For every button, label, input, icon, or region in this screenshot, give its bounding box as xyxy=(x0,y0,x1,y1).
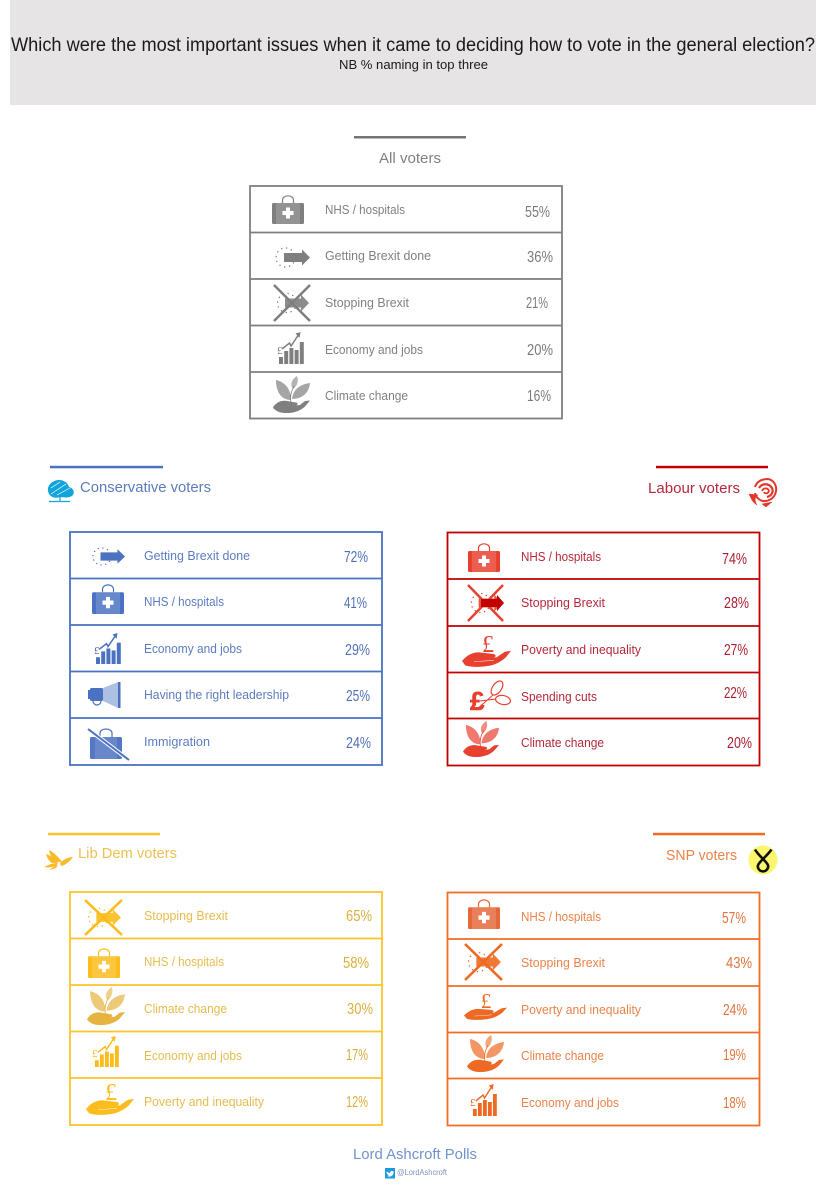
icon: pound in hand: £ xyxy=(105,1080,117,1106)
value: 30%: 30% xyxy=(347,1001,373,1018)
table frame xyxy=(250,186,562,418)
value: 22%: 22% xyxy=(724,685,747,702)
label: NHS / hospitals: NHS / hospitals xyxy=(521,909,601,924)
icon: pound in hand xyxy=(86,1080,134,1115)
panel: conservative voters xyxy=(48,466,382,765)
label: Climate change: Climate change xyxy=(144,1001,227,1016)
header band xyxy=(10,0,816,105)
table frame xyxy=(70,532,382,765)
label: NHS / hospitals: NHS / hospitals xyxy=(325,202,405,217)
label: Spending cuts: Spending cuts xyxy=(521,689,597,704)
icon: lib dem bird logo xyxy=(44,850,73,870)
panel: lib dem voters xyxy=(44,833,382,1125)
icon: economy chart xyxy=(92,1036,119,1067)
table frame xyxy=(448,532,760,766)
value: 25%: 25% xyxy=(346,688,370,705)
icon: medical case xyxy=(88,949,120,978)
heading: snp voters: SNP voters xyxy=(666,847,737,864)
label: Economy and jobs: Economy and jobs xyxy=(144,1048,242,1063)
icon: arrow leaving EU stars xyxy=(93,548,125,565)
icon: labour rose logo xyxy=(749,479,776,507)
value: 24%: 24% xyxy=(346,735,371,752)
icon: snp logo xyxy=(748,846,778,874)
label: Getting Brexit done: Getting Brexit done xyxy=(144,548,250,563)
label: Having the right leadership: Having the right leadership xyxy=(144,687,289,702)
heading: labour voters: Labour voters xyxy=(648,480,740,497)
label: Poverty and inequality: Poverty and inequality xyxy=(144,1094,264,1109)
heading: labour voters xyxy=(648,466,768,497)
value: 55%: 55% xyxy=(525,204,550,221)
icon: megaphone xyxy=(88,682,120,708)
heading: all voters: All voters xyxy=(379,150,441,167)
label: Poverty and inequality: Poverty and inequality xyxy=(521,1002,641,1017)
label: Poverty and inequality: Poverty and inequality xyxy=(521,642,641,657)
icon: pound in hand: £ xyxy=(481,989,491,1013)
brand name: Lord Ashcroft Polls xyxy=(353,1146,477,1163)
label: Economy and jobs: Economy and jobs xyxy=(325,342,423,357)
label: Climate change: Climate change xyxy=(521,1048,604,1063)
heading: conservative voters: Conservative voters xyxy=(80,479,211,496)
value: 24%: 24% xyxy=(723,1002,747,1019)
label: Climate change: Climate change xyxy=(325,388,408,403)
heading: lib dem voters xyxy=(48,833,177,862)
label: Immigration: Immigration xyxy=(144,734,210,749)
value: 21%: 21% xyxy=(526,295,548,312)
value: 74%: 74% xyxy=(722,551,747,568)
value: 36%: 36% xyxy=(527,249,553,266)
value: 16%: 16% xyxy=(527,388,551,405)
icon: crossed out arrow xyxy=(468,585,504,621)
title: Which were the most important issues when it came to deciding how to vote in the general election? xyxy=(11,35,815,56)
heading: lib dem voters: Lib Dem voters xyxy=(78,845,177,862)
icon: scissors cutting pound: £ xyxy=(470,686,485,716)
table frame xyxy=(70,892,382,1125)
value: 72%: 72% xyxy=(344,549,368,566)
icon: economy chart xyxy=(470,1084,497,1116)
icon: plant in hand xyxy=(463,721,499,757)
icon: pound in hand xyxy=(464,989,507,1020)
table frame xyxy=(448,892,760,1126)
value: 65%: 65% xyxy=(346,908,372,925)
value: 41%: 41% xyxy=(344,595,367,612)
icon: economy chart: £ xyxy=(470,1097,476,1109)
label: NHS / hospitals: NHS / hospitals xyxy=(521,549,601,564)
value: 17%: 17% xyxy=(346,1047,368,1064)
twitter handle: @LordAshcroft xyxy=(397,1168,448,1177)
value: 12%: 12% xyxy=(346,1094,368,1111)
label: Stopping Brexit: Stopping Brexit xyxy=(325,295,409,310)
icon: arrow leaving EU stars xyxy=(276,248,310,267)
panel: labour voters xyxy=(448,466,776,766)
label: NHS / hospitals: NHS / hospitals xyxy=(144,954,224,969)
icon: economy chart: £ xyxy=(94,645,100,657)
icon: medical case xyxy=(92,585,124,614)
panel: all voters xyxy=(250,136,562,418)
icon: crossed out arrow xyxy=(465,944,502,980)
icon: plant in hand xyxy=(87,987,125,1025)
value: 27%: 27% xyxy=(724,642,748,659)
subtitle: NB % naming in top three xyxy=(339,57,488,72)
label: Climate change: Climate change xyxy=(521,735,604,750)
value: 19%: 19% xyxy=(723,1047,746,1064)
icon: economy chart xyxy=(277,332,304,364)
value: 20%: 20% xyxy=(527,342,553,359)
label: Stopping Brexit: Stopping Brexit xyxy=(144,908,228,923)
icon: economy chart xyxy=(94,633,121,664)
icon: crossed out arrow xyxy=(85,900,122,935)
heading: snp voters xyxy=(653,833,765,864)
heading: all voters xyxy=(354,136,466,167)
icon: plant in hand xyxy=(467,1035,504,1072)
panel: snp voters xyxy=(448,833,778,1126)
value: 18%: 18% xyxy=(723,1095,746,1112)
value: 20%: 20% xyxy=(727,735,752,752)
icon: crossed out suitcase xyxy=(88,729,129,760)
label: Stopping Brexit: Stopping Brexit xyxy=(521,595,605,610)
label: Stopping Brexit: Stopping Brexit xyxy=(521,955,605,970)
label: Getting Brexit done: Getting Brexit done xyxy=(325,248,431,263)
icon: pound in hand xyxy=(462,632,511,667)
icon: medical case xyxy=(272,196,304,224)
icon: pound in hand: £ xyxy=(482,632,494,658)
label: Economy and jobs: Economy and jobs xyxy=(521,1095,619,1110)
value: 58%: 58% xyxy=(343,955,369,972)
icon: twitter xyxy=(385,1168,395,1178)
icon: medical case xyxy=(468,544,500,572)
icon: conservative tree logo xyxy=(48,480,74,502)
label: Economy and jobs: Economy and jobs xyxy=(144,641,242,656)
value: 28%: 28% xyxy=(724,595,749,612)
label: NHS / hospitals: NHS / hospitals xyxy=(144,594,224,609)
value: 43%: 43% xyxy=(726,955,752,972)
icon: medical case xyxy=(468,900,500,929)
icon: scissors cutting pound xyxy=(470,679,511,716)
footer credit xyxy=(353,1146,477,1178)
icon: economy chart: £ xyxy=(92,1048,98,1060)
value: 29%: 29% xyxy=(345,642,370,659)
icon: crossed out arrow xyxy=(274,285,310,321)
value: 57%: 57% xyxy=(722,910,746,927)
icon: plant in hand xyxy=(273,376,310,413)
icon: economy chart: £ xyxy=(277,345,283,357)
